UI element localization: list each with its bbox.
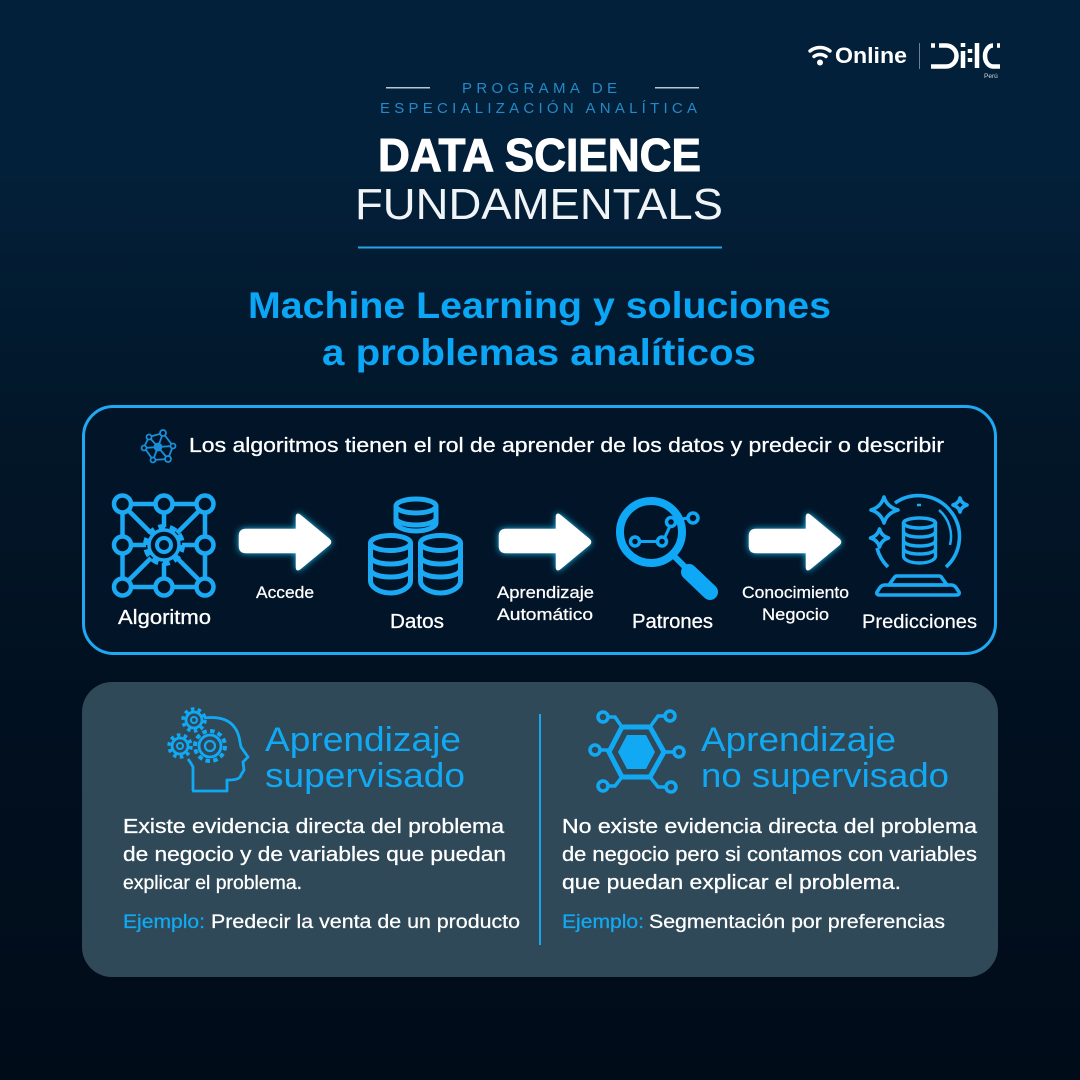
label: Conocimiento Negocio [742,583,849,624]
description: que puedan explicar el problema. [562,872,901,894]
column: aprendizaje no supervisado [562,711,978,933]
arrow: conocimiento negocio [750,515,840,569]
heading: Aprendizaje supervisado: Aprendizaje [265,721,461,759]
subtitle [248,285,831,373]
title [355,129,723,248]
panel heading: Los algoritmos tienen el rol de aprender de los datos y predecir o describir [189,435,944,457]
label: Conocimiento Negocio: Negocio [762,605,829,624]
panel: algorithm flow [84,406,996,654]
label: Accede: Accede [256,583,314,602]
title: FUNDAMENTALS [355,180,723,229]
icon: algorithm [114,496,214,596]
icon: network sphere [142,430,176,462]
example: Predecir la venta de un producto [211,912,520,933]
arrow: accede [240,515,330,569]
arrow: aprendizaje automatico [500,515,590,569]
icon: magnifier with pattern [620,501,710,592]
label: Patrones: Patrones [632,611,713,633]
logo: Online DMC Perú [810,43,1000,80]
heading: Aprendizaje supervisado: supervisado [265,757,465,795]
program eyebrow [380,80,699,117]
description: Existe evidencia directa del problema [123,816,505,838]
description: de negocio pero si contamos con variables [562,844,977,866]
example: Segmentación por preferencias [649,912,945,933]
label: Conocimiento Negocio: Conocimiento [742,583,849,602]
logo: Online DMC Perú: Online [835,43,907,68]
program eyebrow: PROGRAMA DE [462,80,617,97]
label: Aprendizaje Automático: Aprendizaje [497,583,594,602]
description: explicar el problema. [123,873,302,894]
heading: Aprendizaje no supervisado: Aprendizaje [701,721,896,759]
label: Algoritmo: Algoritmo [118,607,211,629]
label: Aprendizaje Automático [497,583,594,624]
example: Ejemplo: [562,912,644,933]
icon: head with gears [169,709,248,791]
example [123,912,520,933]
heading: Aprendizaje no supervisado: no supervisado [701,757,949,795]
label: Datos: Datos [390,611,444,633]
logo: Online DMC Perú: Perú [984,73,998,80]
description [123,816,506,894]
example [562,912,945,933]
icon: data cylinders [370,499,460,593]
icon: crystal ball with data [870,496,967,595]
description [562,816,978,894]
example: Ejemplo: [123,912,205,933]
column: aprendizaje supervisado [123,709,520,933]
subtitle: a problemas analíticos [322,332,756,373]
label: Predicciones: Predicciones [862,611,977,633]
program eyebrow: ESPECIALIZACIÓN ANALÍTICA [380,100,697,117]
subtitle: Machine Learning y soluciones [248,285,831,326]
panel: learning types [82,682,998,977]
heading: Aprendizaje no supervisado [701,721,949,795]
label: Aprendizaje Automático: Automático [497,605,593,624]
title: DATA SCIENCE [378,129,701,181]
icon: hexagon circuit [590,711,684,792]
description: No existe evidencia directa del problema [562,816,978,838]
heading: Aprendizaje supervisado [265,721,465,795]
description: de negocio y de variables que puedan [123,844,506,866]
